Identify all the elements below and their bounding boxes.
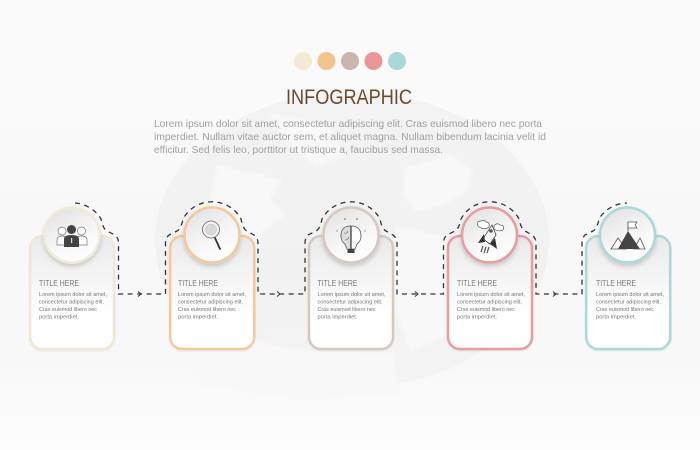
panel: step 4: TITLE HERE <box>457 279 497 288</box>
panel: step 2: Cras euismod libero nec <box>178 307 236 313</box>
panel: step 5: Lorem ipsum dolor sit amet, <box>596 292 664 298</box>
icon: rocket <box>477 220 504 253</box>
arrow markers <box>138 292 556 296</box>
panel: step 4: Lorem ipsum dolor sit amet, <box>457 292 525 298</box>
dashed connector line <box>75 202 627 294</box>
icon: light bulb <box>336 218 366 253</box>
panel: step 3 <box>309 208 393 349</box>
title: INFOGRAPHIC <box>286 86 412 109</box>
icon: team <box>57 225 87 247</box>
panel: step 1: TITLE HERE <box>39 279 79 288</box>
intro text: Lorem ipsum dolor sit amet, consectetur adipiscing elit. Cras euismod libero nec porta <box>154 118 542 130</box>
panel: step 5 <box>586 208 670 349</box>
panel: step 2: Lorem ipsum dolor sit amet, <box>178 292 246 298</box>
panel: step 3: porta imperdiet. <box>318 314 358 320</box>
panel: step 4: porta imperdiet. <box>457 314 497 320</box>
panel: step 2: TITLE HERE <box>178 279 218 288</box>
panel: step 4 <box>448 208 532 349</box>
color dots <box>294 52 406 70</box>
panel: step 1: Cras euismod libero nec <box>39 307 97 313</box>
panel: step 2: consectetur adipiscing elit. <box>178 300 243 306</box>
panel: step 5: TITLE HERE <box>596 279 636 288</box>
panel: step 2 <box>170 208 254 349</box>
panel: step 3: Lorem ipsum dolor sit amet, <box>318 292 386 298</box>
panel: step 2: porta imperdiet. <box>178 314 218 320</box>
intro text: imperdiet. Nullam vitae auctor sem, et aliquet magna. Nullam bibendum lacinia velit id <box>154 131 546 143</box>
panel: step 1 <box>30 208 114 349</box>
intro text <box>154 118 546 156</box>
panel: step 5: Cras euismod libero nec <box>596 307 654 313</box>
icon: magnifier <box>202 221 220 249</box>
panel: step 3: Cras euismod libero nec <box>318 307 376 313</box>
world globe watermark <box>155 92 549 400</box>
panel: step 1: Lorem ipsum dolor sit amet, <box>39 292 107 298</box>
panel: step 3: TITLE HERE <box>318 279 358 288</box>
panel: step 1: porta imperdiet. <box>39 314 79 320</box>
panel: step 4: Cras euismod libero nec <box>457 307 515 313</box>
intro text: efficitur. Sed felis leo, porttitor ut tristique a, faucibus sed massa. <box>154 144 443 156</box>
panel: step 3: consectetur adipiscing elit. <box>318 300 382 306</box>
panel: step 5: consectetur adipiscing elit. <box>596 300 661 306</box>
panel: step 1: consectetur adipiscing elit. <box>39 300 104 306</box>
panel: step 4: consectetur adipiscing elit. <box>457 300 522 306</box>
icon: mountain with flag <box>611 222 645 249</box>
panel: step 5: porta imperdiet. <box>596 314 636 320</box>
